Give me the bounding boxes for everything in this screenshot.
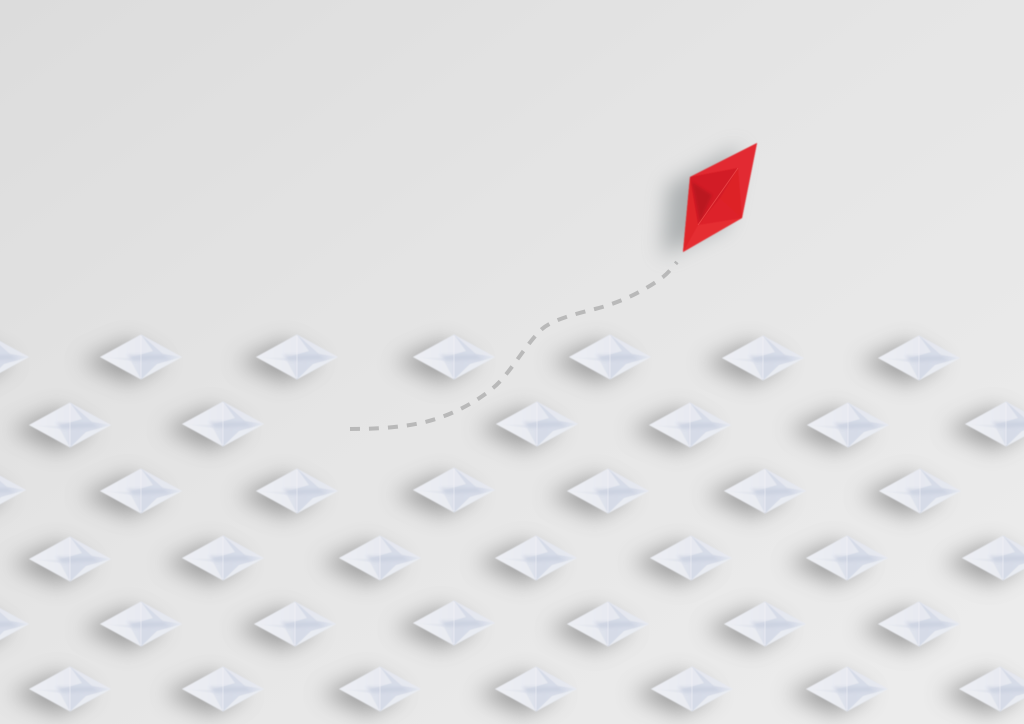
row 4 of white boats [10,536,1024,585]
row 2 of white boats [10,402,1024,451]
row 6 of white boats [10,666,1024,715]
dashed path of the red boat [350,262,677,429]
row 5 of white boats [0,600,960,650]
row 3 of white boats [0,468,961,517]
row 1 of white boats [0,334,960,384]
icon: red paper boat [662,143,757,256]
